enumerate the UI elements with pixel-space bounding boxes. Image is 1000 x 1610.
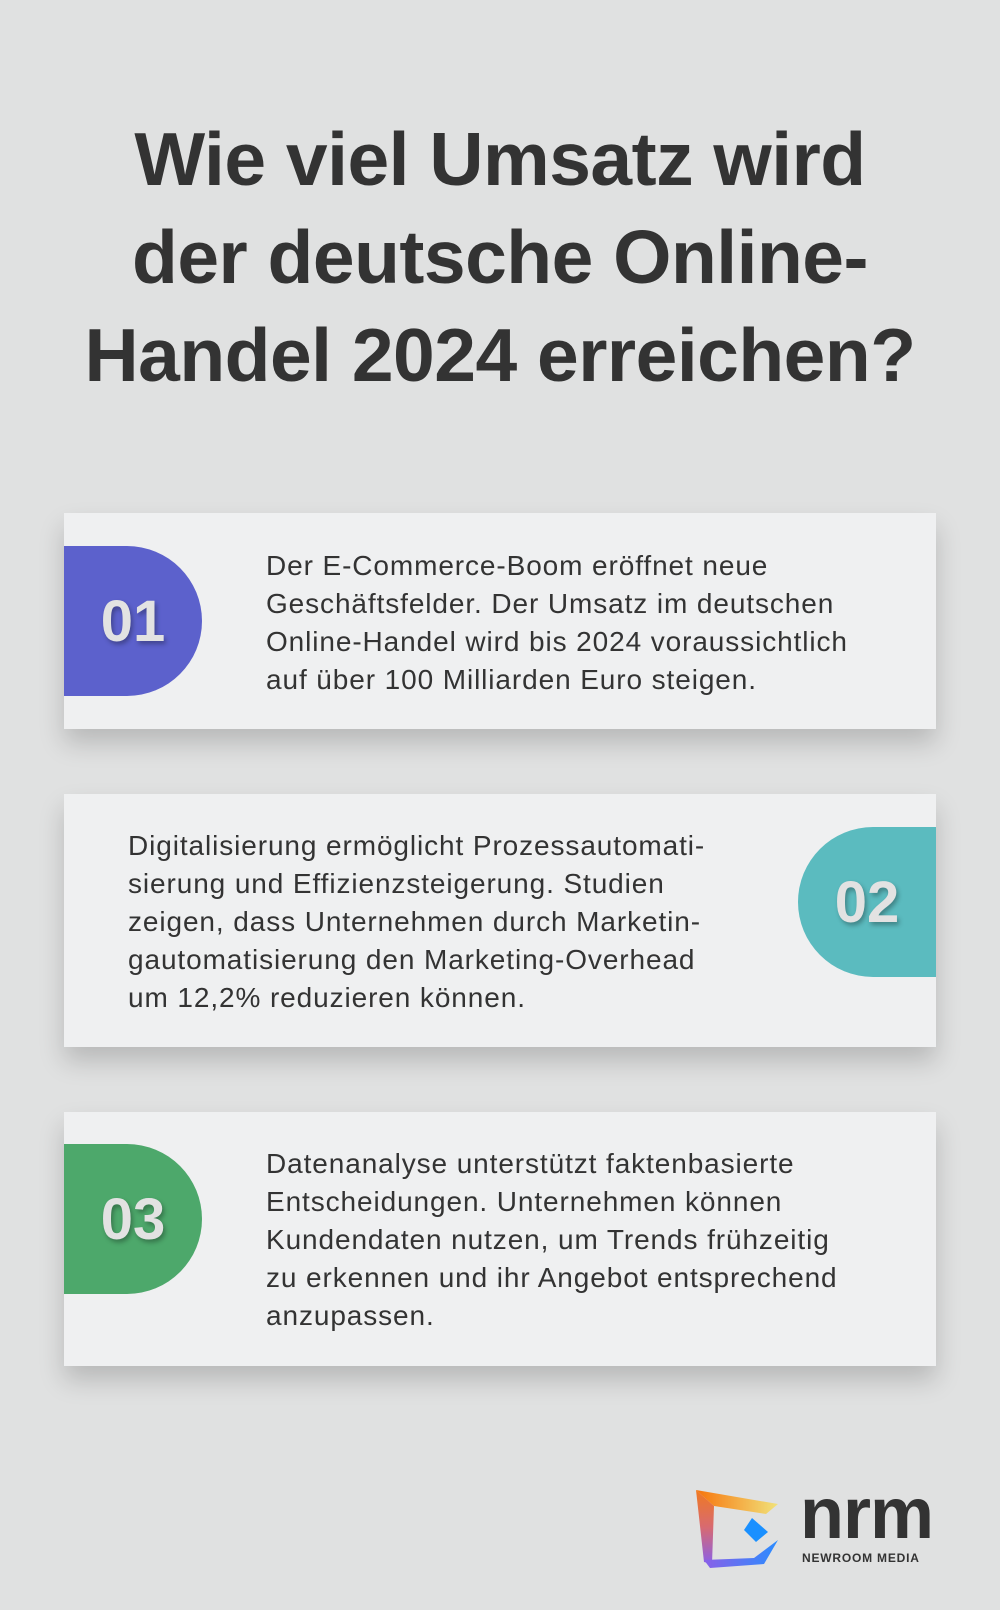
panel: card 3 bbox=[64, 1112, 936, 1366]
title: Wie viel Umsatz wird bbox=[134, 117, 866, 201]
text block 1: auf über 100 Milliarden Euro steigen. bbox=[266, 664, 757, 695]
text block 3: Kundendaten nutzen, um Trends frühzeitig bbox=[266, 1224, 830, 1255]
text block 1: Der E-Commerce-Boom eröffnet neue bbox=[266, 550, 768, 581]
title: der deutsche Online- bbox=[132, 215, 868, 299]
badge 02: 02 bbox=[835, 870, 899, 934]
text block 3: Datenanalyse unterstützt faktenbasierte bbox=[266, 1148, 795, 1179]
badge 01 bbox=[64, 546, 202, 696]
text block 2: Digitalisierung ermöglicht Prozessautomati- bbox=[128, 830, 705, 861]
text block 2 bbox=[128, 830, 705, 1013]
badge 03 bbox=[64, 1144, 202, 1294]
title bbox=[84, 117, 916, 397]
text block 2: zeigen, dass Unternehmen durch Marketin- bbox=[128, 906, 701, 937]
text block 3: anzupassen. bbox=[266, 1300, 435, 1331]
text block 3: Entscheidungen. Unternehmen können bbox=[266, 1186, 782, 1217]
text block 1: Online-Handel wird bis 2024 voraussichtlich bbox=[266, 626, 848, 657]
badge 03: 03 bbox=[101, 1186, 165, 1252]
badge 01: 01 bbox=[101, 588, 165, 654]
text block 1: Geschäftsfelder. Der Umsatz im deutschen bbox=[266, 588, 834, 619]
text block 2: sierung und Effizienzsteigerung. Studien bbox=[128, 868, 665, 899]
panel: card 1 bbox=[64, 513, 936, 729]
logo bbox=[696, 1474, 933, 1568]
text block 3 bbox=[266, 1148, 838, 1331]
brand name: nrm bbox=[800, 1474, 933, 1554]
icon: logo mark bbox=[696, 1490, 778, 1568]
title: Handel 2024 erreichen? bbox=[84, 313, 916, 397]
text block 1 bbox=[266, 550, 848, 695]
text block 3: zu erkennen und ihr Angebot entsprechend bbox=[266, 1262, 838, 1293]
panel: card 2 bbox=[64, 794, 936, 1047]
text block 2: um 12,2% reduzieren können. bbox=[128, 982, 526, 1013]
text block 2: gautomatisierung den Marketing-Overhead bbox=[128, 944, 695, 975]
badge 02 bbox=[798, 827, 936, 977]
brand tagline: NEWROOM MEDIA bbox=[802, 1551, 920, 1565]
